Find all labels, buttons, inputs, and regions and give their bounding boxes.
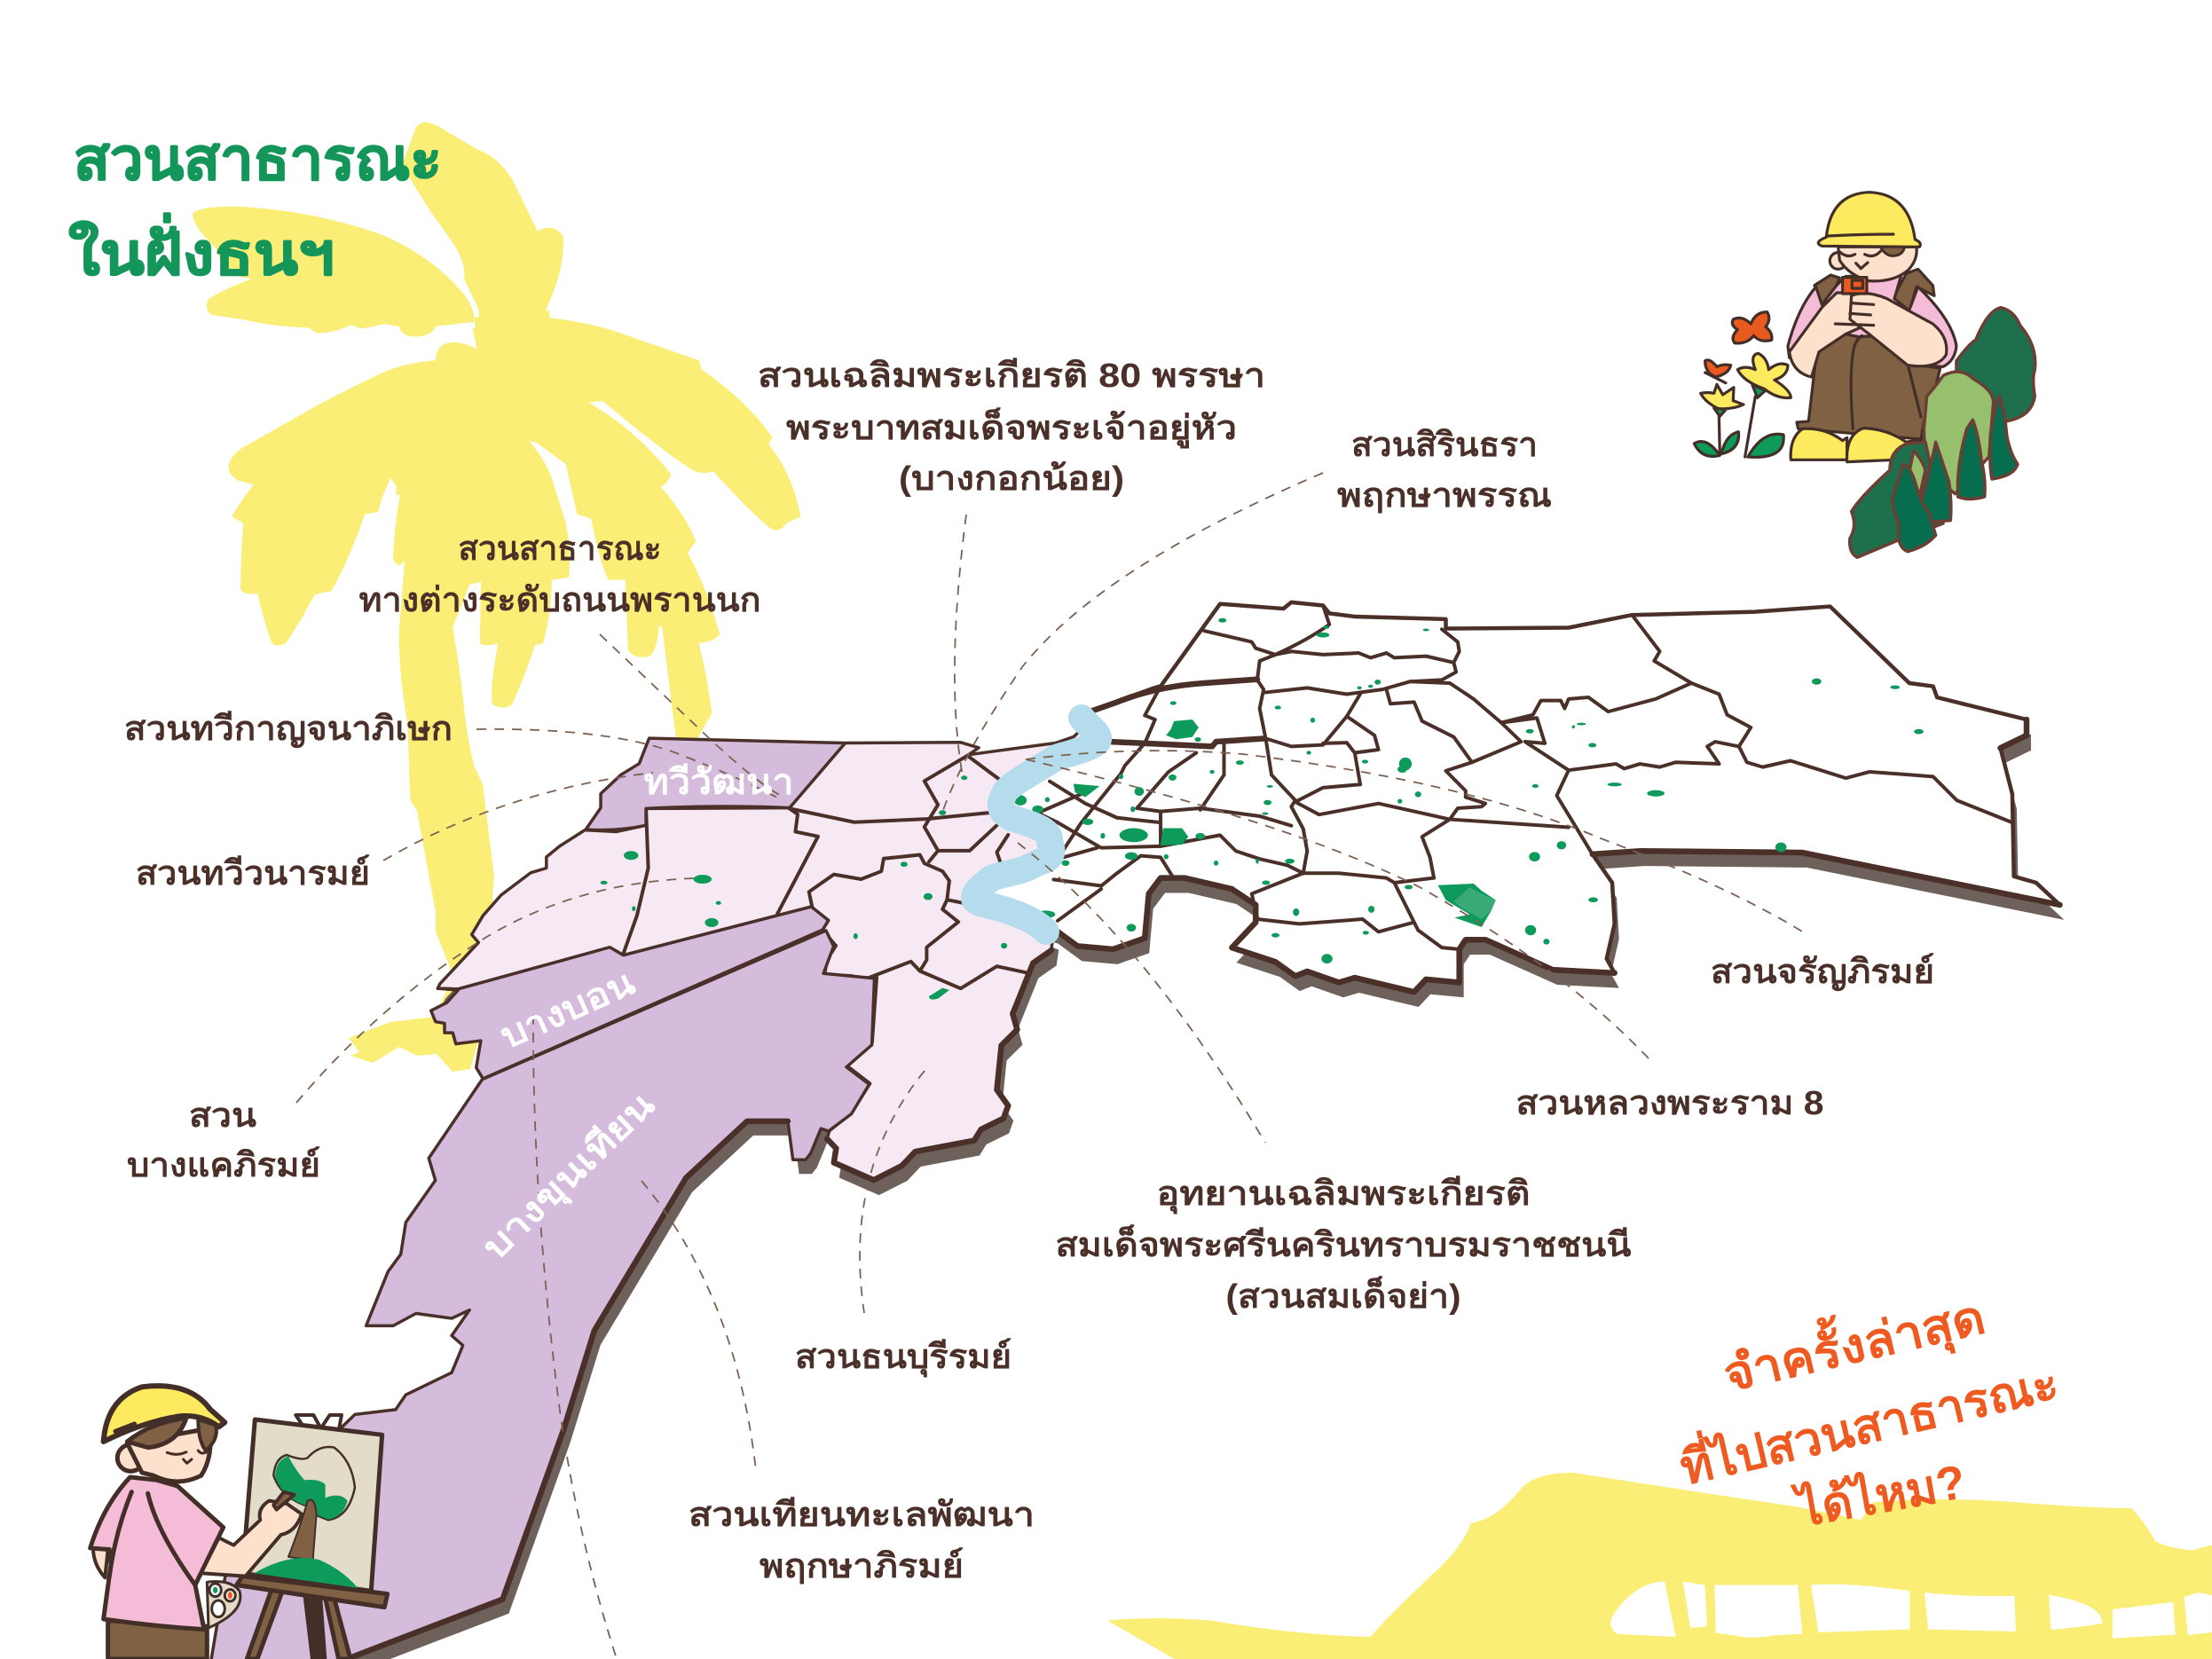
map shadow xyxy=(299,617,2064,1659)
park labels: พฤกษาภิรมย์ xyxy=(760,1547,964,1585)
park labels: พฤกษาพรรณ xyxy=(1337,477,1552,515)
palm tree silhouette xyxy=(193,122,800,1072)
question callout: จำครั้งล่าสุด xyxy=(1717,1282,1991,1405)
park labels: สวนธนบุรีรมย์ xyxy=(795,1338,1012,1378)
district labels: ทวีวัฒนา xyxy=(644,763,793,802)
title xyxy=(68,126,442,287)
park labels: สมเด็จพระศรีนครินทราบรมราชชนนี xyxy=(1056,1224,1632,1264)
leader lines xyxy=(296,473,1802,1659)
park labels xyxy=(124,358,1934,1585)
district: Bang Bon (purple) xyxy=(431,907,829,1079)
boat silhouette xyxy=(1107,1473,2212,1659)
park labels: สวนจรัญภิรมย์ xyxy=(1711,953,1934,991)
park labels: (บางกอกน้อย) xyxy=(899,460,1124,498)
park labels: สวนสิรินธรา xyxy=(1351,427,1538,464)
park labels: สวนเฉลิมพระเกียรติ 80 พรรษา xyxy=(758,358,1265,395)
map: Thonburi districts (pink) xyxy=(437,719,1098,1180)
parks: green spots west xyxy=(601,775,1007,1000)
question callout: ที่ไปสวนสาธารณะ xyxy=(1673,1349,2064,1496)
district: Thawi Watthana (purple) xyxy=(586,738,846,830)
park labels: สวนหลวงพระราม 8 xyxy=(1515,1085,1824,1122)
title: ในฝั่งธนฯ xyxy=(68,212,335,287)
character: painter at easel xyxy=(91,1386,388,1659)
park labels: สวน xyxy=(189,1097,256,1135)
map: east districts (white) xyxy=(974,602,2059,992)
river xyxy=(974,718,1098,932)
park labels: อุทยานเฉลิมพระเกียรติ xyxy=(1157,1175,1530,1215)
park labels: สวนทวีกาญจนาภิเษก xyxy=(124,711,453,748)
question callout xyxy=(1673,1282,2064,1537)
park labels: สวนทวีวนารมย์ xyxy=(136,854,370,892)
park labels: พระบาทสมเด็จพระเจ้าอยู่หัว xyxy=(786,407,1237,449)
character: seated with phone, flowers and bushes xyxy=(1694,193,2035,557)
question callout: ได้ไหม? xyxy=(1790,1453,1970,1537)
park labels: สวนเทียนทะเลพัฒนา xyxy=(689,1497,1035,1534)
parks: green spots east xyxy=(1014,618,1924,963)
park labels: ทางต่างระดับถนนพรานนก xyxy=(358,582,761,619)
park labels: บางแคภิรมย์ xyxy=(127,1146,320,1184)
park labels: สวนสาธารณะ xyxy=(458,531,662,568)
park labels: (สวนสมเด็จย่า) xyxy=(1226,1276,1460,1316)
district labels: บางขุนเทียน xyxy=(476,1085,664,1269)
district: Bang Khun Thian (purple) xyxy=(208,931,874,1659)
title: สวนสาธารณะ xyxy=(74,126,442,192)
district labels: บางบอน xyxy=(495,963,641,1057)
district labels xyxy=(476,763,793,1269)
